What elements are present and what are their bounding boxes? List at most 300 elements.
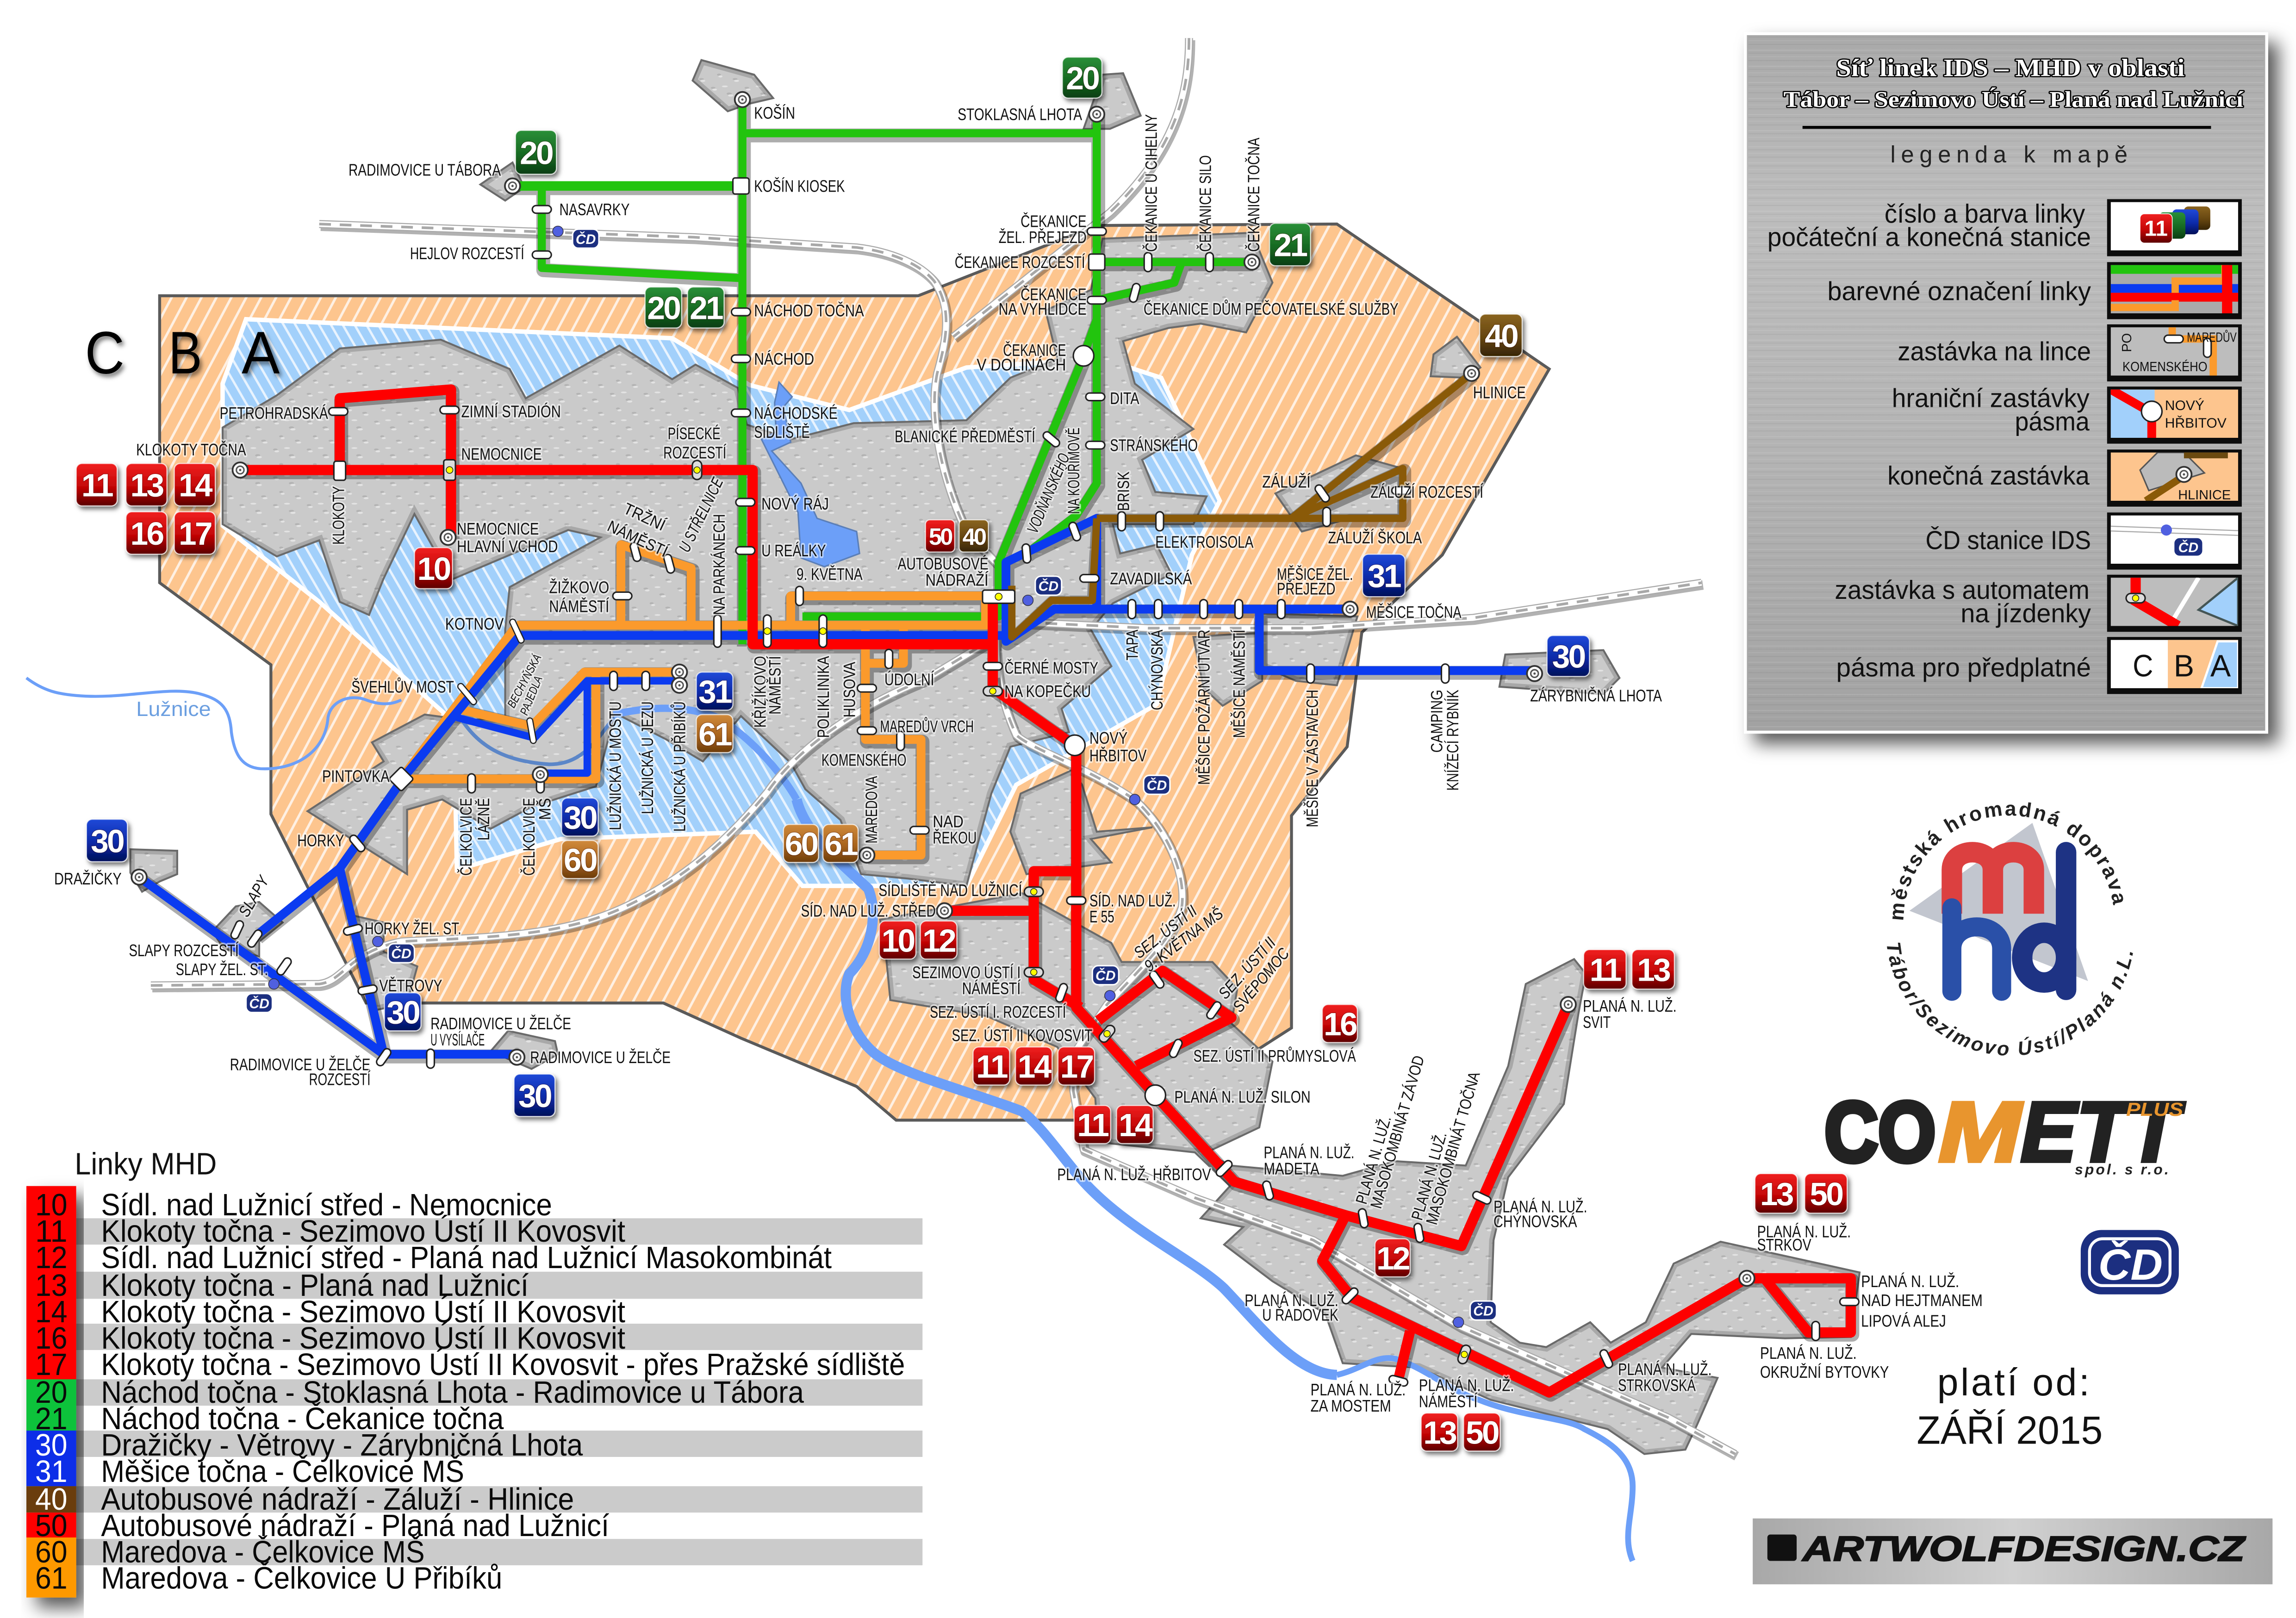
badge 10 at Nemocnice: 10 <box>417 551 450 587</box>
line number badges <box>76 57 1847 1451</box>
orange route badges: 61 <box>698 716 732 752</box>
station labels: horizontal: KOMENSKÉHO <box>821 751 906 770</box>
station labels: horizontal: ČEKANICE <box>1020 285 1087 304</box>
grey built-up city areas <box>131 60 1860 1454</box>
railway station dots <box>268 226 1464 1327</box>
legend descriptions: pásma pro předplatné <box>1836 653 2091 683</box>
station labels: horizontal: NÁMĚSTÍ <box>962 979 1021 998</box>
station labels: vertical and slanted: ČEKANICE TOČNA <box>1245 137 1263 252</box>
orange route badges <box>561 715 858 878</box>
station labels: vertical and slanted: POLIKLINIKA <box>815 656 833 738</box>
station labels: horizontal: NAD HEJTMANEM <box>1861 1291 1983 1310</box>
station labels: horizontal: KOTNOV <box>445 614 504 633</box>
line numbers: 40 <box>35 1482 68 1517</box>
station labels: horizontal: KOŠÍN KIOSEK <box>754 176 845 195</box>
blue route badges <box>87 554 1589 1116</box>
line numbers: 60 <box>35 1535 68 1569</box>
swatch: line number badges <box>2111 202 2238 250</box>
line numbers: 17 <box>35 1348 68 1382</box>
station labels: horizontal: SÍD. NAD LUŽ. <box>1089 891 1176 910</box>
red route badges in the south: 14 <box>1119 1107 1153 1143</box>
badges at Klokoty točna: 11 <box>81 467 113 504</box>
logo: COMETT PLUS: CO <box>1824 1084 1936 1179</box>
station labels: horizontal: SÍDLIŠTĚ NAD LUŽNICÍ <box>878 881 1022 900</box>
station labels: horizontal: KLOKOTY TOČNA <box>136 440 246 459</box>
logo: COMETT PLUS: PLUS <box>2126 1099 2183 1120</box>
orange route badges: 60 <box>785 826 818 862</box>
station labels: vertical and slanted: SLAPY <box>235 872 273 920</box>
green route badges: 20 <box>520 135 553 171</box>
line descriptions: Maredova - Čelkovice MŠ <box>101 1535 425 1569</box>
station labels: horizontal: ZÁLUŽÍ ŠKOLA <box>1328 528 1422 547</box>
swatch: line number badges: 11 <box>2145 216 2168 241</box>
station labels: horizontal: NÁCHODSKÉ <box>754 404 838 423</box>
station labels: vertical and slanted: PLANÁ N. LUŽ. <box>1408 1130 1450 1222</box>
station labels: vertical and slanted: SVÉPOMOC <box>1229 944 1293 1015</box>
legend swatch frames <box>2107 199 2242 694</box>
swatch: stop on line: KOMENSKÉHO <box>2122 360 2208 374</box>
station labels: vertical and slanted: SEZ. ÚSTÍ II <box>1215 934 1279 1002</box>
station labels: horizontal: NEMOCNICE <box>457 519 539 538</box>
station labels: horizontal: U VYSÍLAČE <box>430 1030 485 1049</box>
swatch: zone boundary stop <box>2111 390 2238 438</box>
route shadow <box>141 102 1852 1395</box>
ČD station icons: ČD <box>1039 579 1058 594</box>
station labels: horizontal: ELEKTROISOLA <box>1155 532 1254 551</box>
blue route badges: 31 <box>1368 558 1401 594</box>
station labels: horizontal: STRKOV <box>1757 1235 1811 1254</box>
station labels: horizontal: MĚŠICE TOČNA <box>1366 603 1462 622</box>
station labels: horizontal: PLANÁ N. LUŽ. <box>1757 1222 1851 1241</box>
station labels: horizontal: ZIMNÍ STADIÓN <box>461 402 561 421</box>
ČD station icons: ČD <box>249 996 269 1011</box>
blue route badges: 30 <box>1552 639 1585 675</box>
grey alternating row bands <box>76 1218 922 1565</box>
logo: městská hromadná doprava <box>1882 797 2138 1060</box>
zone letters C B A: B <box>168 320 202 386</box>
station labels: vertical and slanted: MASOKOMBINÁT ZÁVOD <box>1367 1053 1428 1211</box>
station labels: horizontal: MĚŠICE ŽEL. <box>1277 565 1353 584</box>
swatch: railway station <box>2111 516 2238 564</box>
line numbers: 12 <box>35 1241 68 1275</box>
logo: COMETT PLUS: ETT <box>2021 1084 2185 1179</box>
legend descriptions: zastávka na lince <box>1898 336 2091 366</box>
routes 10 to 17 and 50 in red <box>239 390 1851 1393</box>
swatch: stop with ticket machine <box>2111 578 2238 626</box>
station labels: horizontal: STOKLASNÁ LHOTA <box>958 105 1083 124</box>
brown badge 40 at Hlinice: 40 <box>1485 318 1518 354</box>
station labels: horizontal: RADIMOVICE U ŽELČE <box>430 1014 571 1033</box>
red route badges in the south: 13 <box>1637 952 1670 988</box>
red route badges in the south: 11 <box>976 1049 1008 1085</box>
zone A hatched blue area <box>223 319 1220 886</box>
legend descriptions: pásma <box>2015 407 2090 436</box>
station labels: vertical and slanted: TAPA <box>1123 629 1141 660</box>
station labels: vertical and slanted: BRISK <box>1114 472 1132 511</box>
station labels: horizontal: PLANÁ N. LUŽ. <box>1311 1380 1406 1399</box>
station labels: vertical and slanted: VODŇANSKÉHO <box>1024 451 1073 536</box>
orange route badges: 60 <box>564 842 597 878</box>
line descriptions: Klokoty točna - Sezimovo Ústí II Kovosvit <box>101 1295 625 1329</box>
station labels: horizontal: NÁDRAŽÍ <box>926 571 989 590</box>
blue route badges: 30 <box>518 1078 551 1114</box>
station labels: horizontal: BLANICKÉ PŘEDMĚSTÍ <box>895 427 1036 446</box>
zone letters C B A: A <box>242 320 280 386</box>
station labels: vertical and slanted: MĚŠICE NÁMĚSTÍ <box>1230 629 1248 738</box>
station labels: horizontal: NÁMĚSTÍ <box>549 597 610 616</box>
green route badges: 21 <box>690 290 723 326</box>
station labels: vertical and slanted: NÁMĚSTÍ <box>605 517 671 561</box>
station labels: horizontal: ZA MOSTEM <box>1311 1396 1391 1415</box>
ČD station icons: ČD <box>1473 1303 1493 1319</box>
station labels: horizontal: PLANÁ N. LUŽ. <box>1493 1197 1587 1216</box>
station labels: horizontal: SEZ. ÚSTÍ II PRŮMYSLOVÁ <box>1194 1046 1356 1065</box>
station labels: horizontal: PLANÁ N. LUŽ. <box>1760 1344 1857 1363</box>
station labels: horizontal: DRAŽIČKY <box>54 869 122 888</box>
legend descriptions: konečná zastávka <box>1887 461 2090 491</box>
station labels: horizontal: HLINICE <box>1473 383 1526 402</box>
station labels: horizontal: NASAVRKY <box>560 200 630 219</box>
brushed metal plate <box>1745 34 2267 732</box>
orange route badges: 61 <box>824 826 858 862</box>
zone letters C B A <box>85 320 280 386</box>
station labels: horizontal: CHÝNOVSKÁ <box>1493 1212 1577 1231</box>
station labels: horizontal: U ŘADOVEK <box>1262 1306 1338 1325</box>
swatch: terminal stop: HLINICE <box>2178 488 2231 503</box>
red route badges in the south: 50 <box>1466 1415 1499 1451</box>
line descriptions: Klokoty točna - Sezimovo Ústí II Kovosvit - přes Pražské sídliště <box>101 1348 905 1382</box>
station labels: vertical and slanted: U STŘELNICE <box>675 474 727 555</box>
routes 60 and 61 in orange <box>401 545 993 855</box>
logo: COMETT PLUS: M <box>1939 1084 2023 1179</box>
colour column <box>26 1186 76 1598</box>
swatch: coloured lines <box>2111 265 2238 313</box>
line descriptions: Autobusové nádraží - Záluží - Hlinice <box>101 1482 574 1517</box>
station labels: horizontal: AUTOBUSOVÉ <box>897 554 989 573</box>
station labels: horizontal: NOVÝ RÁJ <box>761 494 829 513</box>
badges at Klokoty točna: 14 <box>179 467 213 504</box>
routes 30 and 31 in blue <box>139 518 1535 1054</box>
station labels: horizontal: PETROHRADSKÁ <box>220 404 328 423</box>
station labels: horizontal: ROZCESTÍ <box>309 1070 371 1089</box>
station labels: vertical and slanted: MĚŠICE POŽÁRNÍ ÚTVAR <box>1195 629 1213 785</box>
station labels: horizontal: NÁMĚSTÍ <box>1419 1392 1478 1411</box>
station labels: horizontal: MAREDŮV VRCH <box>880 716 974 736</box>
legend subtitle: legenda k mapě <box>1891 141 2128 168</box>
station labels: horizontal: SEZIMOVO ÚSTÍ I <box>912 963 1020 982</box>
station labels: vertical and slanted: LUŽNICKÁ U MOSTU <box>607 701 625 830</box>
station labels: horizontal: PLANÁ N. LUŽ. <box>1861 1272 1959 1291</box>
line numbers <box>35 1188 68 1596</box>
ČD station icons: ČD <box>1095 968 1115 983</box>
red route badges in the south: 16 <box>1324 1006 1357 1042</box>
swatch: fare zones: B <box>2174 649 2194 684</box>
station labels: horizontal: SÍD. NAD LUŽ. STŘED <box>801 902 936 921</box>
station labels: horizontal: 9. KVĚTNA <box>796 565 863 584</box>
panel: map legend <box>1745 34 2267 732</box>
green route badges: 20 <box>1066 60 1099 96</box>
bus route network <box>139 100 1852 1395</box>
red route badges in the south: 11 <box>1077 1107 1108 1143</box>
station labels: horizontal: ŠVEHLŮV MOST <box>351 677 454 696</box>
line descriptions: Měšice točna - Čelkovice MŠ <box>101 1455 464 1489</box>
station labels: horizontal: SLAPY ROZCESTÍ <box>129 941 239 960</box>
green route badges <box>516 57 1311 328</box>
line numbers: 21 <box>35 1402 68 1436</box>
station labels: horizontal: HLAVNÍ VCHOD <box>457 537 558 556</box>
station labels: vertical and slanted: KLOKOTY <box>330 486 348 545</box>
red route badges in the south: 14 <box>1018 1049 1052 1085</box>
station labels: vertical and slanted: NA KOUŘIMOVĚ <box>1065 428 1083 514</box>
station labels: horizontal: VĚTROVY <box>380 976 442 995</box>
red route badges in the south <box>879 921 1847 1451</box>
station labels: horizontal: ÚDOLNÍ <box>884 670 934 689</box>
station labels: horizontal: MADETA <box>1263 1159 1319 1178</box>
logo blue h <box>1952 908 2002 991</box>
station labels: horizontal: PLANÁ N. LUŽ. <box>1263 1143 1355 1162</box>
station labels: horizontal: ŽEL. PŘEJEZD <box>999 228 1087 247</box>
line descriptions: Sídl. nad Lužnicí střed - Planá nad Lužnicí Masokombinát <box>101 1241 832 1275</box>
legend descriptions: hraniční zastávky <box>1892 384 2090 413</box>
station labels: vertical and slanted: LUŽNICKÁ U PŘIBÍKŮ <box>671 701 689 832</box>
station labels: horizontal: HŘBITOV <box>1089 746 1147 765</box>
station labels: horizontal: STRKOVSKÁ <box>1618 1376 1696 1395</box>
legend descriptions: ČD stanice IDS <box>1925 525 2091 555</box>
red route badges in the south: 50 <box>1810 1176 1842 1212</box>
ČD station icons <box>246 229 1496 1320</box>
station labels: vertical and slanted: ČEKANICE U CIHELNY <box>1142 114 1160 252</box>
validity date: platí od: <box>1937 1362 2090 1404</box>
station labels: vertical and slanted: TRŽNÍ <box>621 499 668 535</box>
swatch: fare zones <box>2111 640 2238 688</box>
logo: COMETT PLUS: spol. s r.o. <box>2075 1161 2169 1177</box>
blue route badges: 30 <box>91 823 124 859</box>
red route badges in the south: 12 <box>922 922 955 958</box>
station labels: horizontal: PLANÁ N. LUŽ. SILON <box>1174 1087 1311 1106</box>
station labels: horizontal: ZÁLUŽÍ ROZCESTÍ <box>1370 483 1484 502</box>
station labels: horizontal: NAD <box>933 812 964 831</box>
station labels: vertical and slanted: PAJEDLA <box>518 674 545 717</box>
line numbers: 16 <box>35 1321 68 1356</box>
logo top ring text: městská hromadná doprava <box>1885 797 2131 921</box>
station labels: horizontal: V DOLINÁCH <box>977 355 1066 374</box>
station labels: vertical and slanted <box>235 114 1484 1226</box>
station labels: horizontal: PÍSECKÉ <box>668 424 721 443</box>
line numbers: 10 <box>35 1188 68 1222</box>
station labels: horizontal: PŘEJEZD <box>1277 579 1335 598</box>
station labels: horizontal: PLANÁ N. LUŽ. <box>1419 1376 1514 1395</box>
station labels: horizontal: ŘEKOU <box>933 828 977 847</box>
red route badges in the south: 17 <box>1060 1049 1093 1085</box>
station labels: horizontal: HEJLOV ROZCESTÍ <box>410 244 524 263</box>
station labels: vertical and slanted: 9. KVĚTNA MŠ <box>1141 904 1226 975</box>
station labels: vertical and slanted: MŠ <box>536 798 554 820</box>
line descriptions: Klokoty točna - Planá nad Lužnicí <box>101 1269 529 1303</box>
credit bar: artwolfdesign.cz: ARTWOLFDESIGN.CZ <box>1801 1530 2246 1569</box>
station labels: horizontal: SVIT <box>1583 1013 1611 1032</box>
legend descriptions: počáteční a konečná stanice <box>1767 223 2091 252</box>
station labels: vertical and slanted: BECHYŇSKÁ <box>504 652 544 710</box>
line descriptions: Maredova - Čelkovice U Přibíků <box>101 1562 502 1596</box>
zone letters C B A: C <box>85 320 124 386</box>
station labels: vertical and slanted: PLANÁ N. LUŽ. <box>1352 1114 1395 1206</box>
station labels: horizontal: U REÁLKY <box>761 541 826 560</box>
line descriptions <box>101 1188 905 1596</box>
line numbers: 50 <box>35 1509 68 1543</box>
swatch: fare zones: A <box>2210 649 2231 684</box>
station labels: vertical and slanted: MASOKOMBINÁT TOČNA <box>1423 1069 1484 1226</box>
route 40 in brown <box>1012 373 1472 637</box>
ČD station icons: ČD <box>1147 778 1167 793</box>
station labels: horizontal: NÁCHOD <box>754 349 814 368</box>
legend descriptions <box>1767 199 2091 683</box>
line numbers: 30 <box>35 1428 68 1462</box>
station labels: horizontal: ČEKANICE DŮM PEČOVATELSKÉ SLUŽBY <box>1144 299 1399 318</box>
badges at Klokoty točna: 17 <box>179 516 212 552</box>
panel: list of MHD lines <box>26 1147 922 1598</box>
routes 20 and 21 in green <box>512 100 1252 644</box>
legend title: Tábor – Sezimovo Ústí – Planá nad Lužnicí <box>1784 87 2244 112</box>
swatch: stop on line <box>2111 327 2238 376</box>
line descriptions: Sídl. nad Lužnicí střed - Nemocnice <box>101 1188 552 1222</box>
station labels: horizontal: NEMOCNICE <box>461 444 542 463</box>
station labels: horizontal: ČERNÉ MOSTY <box>1004 658 1098 677</box>
station labels: vertical and slanted: ČEKANICE SILO <box>1197 155 1215 252</box>
station labels: horizontal: NA KOPEČKU <box>1004 682 1091 701</box>
station labels: horizontal: KOŠÍN <box>754 103 795 122</box>
station labels: horizontal: ZÁLUŽÍ <box>1262 473 1311 492</box>
brown badge 40 at Hlinice <box>1480 314 1522 356</box>
zone C boundary with hatched zone B fill <box>160 224 1549 1120</box>
station labels: vertical and slanted: ČELKOLVICE <box>520 798 538 876</box>
red route badges in the south: 11 <box>1590 952 1621 988</box>
legend descriptions: barevné označení linky <box>1828 277 2091 306</box>
legend title <box>1784 54 2244 112</box>
station labels: horizontal: LIPOVÁ ALEJ <box>1861 1311 1946 1330</box>
station labels: horizontal: SEZ. ÚSTÍ II KOVOSVIT <box>952 1026 1092 1045</box>
station labels: horizontal: HORKY <box>297 831 344 850</box>
validity date <box>1916 1362 2103 1453</box>
station labels: vertical and slanted: CAMPING <box>1428 690 1446 753</box>
station labels: horizontal: SLAPY ŽEL. ST. <box>176 960 268 979</box>
station labels: horizontal: DITA <box>1110 389 1139 408</box>
line descriptions: Dražičky - Větrovy - Zárybničná Lhota <box>101 1428 583 1462</box>
station labels: vertical and slanted: MĚŠICE V ZÁSTAVECH <box>1304 690 1322 828</box>
station labels: horizontal: SÍDLIŠTĚ <box>754 423 810 442</box>
logo grey triangle <box>1910 823 2088 981</box>
logo: ČD railways <box>2081 1230 2179 1294</box>
line numbers: 31 <box>35 1455 68 1489</box>
logo bottom ring text: Tábor/Sezimovo Ústí/Planá n.L. <box>1882 940 2138 1060</box>
legend descriptions: na jízdenky <box>1960 599 2091 629</box>
station labels: horizontal: ŽIŽKOVO <box>549 578 609 597</box>
station labels: horizontal: PINTOVKA <box>322 766 390 785</box>
station labels: horizontal: PLANÁ N. LUŽ. HŘBITOV <box>1057 1165 1211 1184</box>
river Lužnice <box>26 678 1633 1561</box>
logo red m <box>1952 852 2034 914</box>
plate texture <box>1748 37 2264 729</box>
station labels: horizontal: OKRUŽNÍ BYTOVKY <box>1760 1363 1889 1382</box>
swatch: terminal stop <box>2111 447 2238 503</box>
line descriptions: Náchod točna - Čekanice točna <box>101 1402 504 1436</box>
station labels: horizontal: E 55 <box>1089 907 1114 926</box>
ČD station icons: ČD <box>576 231 596 247</box>
list heading: Linky MHD <box>75 1147 217 1181</box>
station labels: vertical and slanted: LÁZNĚ <box>475 798 493 840</box>
station labels: vertical and slanted: LUŽNICKÁ U JEZU <box>639 701 657 814</box>
red route badges in the south: 10 <box>882 922 914 958</box>
divider rule <box>1803 126 2211 129</box>
badges at Klokoty točna: 16 <box>131 516 163 552</box>
logo navy d <box>2022 852 2066 990</box>
station labels: horizontal: NOVÝ <box>1089 728 1127 747</box>
lake Náchod <box>761 382 859 566</box>
station labels: vertical and slanted: NÁMĚSTÍ <box>766 656 784 715</box>
station labels: vertical and slanted: ČELKOLVICE <box>457 798 475 876</box>
badges at Klokoty točna <box>76 463 215 554</box>
line numbers: 61 <box>35 1562 68 1596</box>
station labels: horizontal: ZÁRYBNIČNÁ LHOTA <box>1530 686 1662 705</box>
line numbers: 20 <box>35 1375 68 1410</box>
green route badges: 20 <box>647 290 680 326</box>
line descriptions: Náchod točna - Stoklasná Lhota - Radimovice u Tábora <box>101 1375 804 1410</box>
railway lines <box>151 38 1736 1456</box>
red route badges in the south: 13 <box>1423 1415 1456 1451</box>
station labels: horizontal: ČEKANICE <box>1003 341 1066 360</box>
swatch: zone boundary stop: HŘBITOV <box>2165 416 2227 431</box>
station labels: horizontal: ZAVADILSKÁ <box>1110 569 1192 588</box>
station labels: horizontal: ČEKANICE <box>1020 212 1087 230</box>
station labels: horizontal: PLANÁ N. LUŽ. <box>1618 1360 1712 1379</box>
station labels: horizontal: STRÁNSKÉHO <box>1110 436 1198 454</box>
red route badges in the south: 13 <box>1760 1176 1793 1212</box>
station labels: horizontal: ČEKANICE ROZCESTÍ <box>955 253 1085 272</box>
badges 50 and 40 at bus station <box>926 520 989 552</box>
blue route badges: 30 <box>386 994 419 1030</box>
station labels: vertical and slanted: MAREDOVA <box>863 776 881 843</box>
station labels: horizontal: PLANÁ N. LUŽ. <box>1244 1291 1338 1310</box>
line descriptions: Klokoty točna - Sezimovo Ústí II Kovosvit <box>101 1321 625 1356</box>
line numbers: 11 <box>35 1214 68 1249</box>
credit bar: artwolfdesign.cz <box>1753 1518 2272 1584</box>
logo: ČD railways: ČD <box>2098 1240 2163 1289</box>
station labels: horizontal: RADIMOVICE U ŽELČE <box>530 1048 671 1067</box>
station labels: horizontal: ROZCESTÍ <box>663 443 727 462</box>
station labels: horizontal: RADIMOVICE U ŽELČE <box>230 1055 371 1074</box>
station labels: horizontal: SEZ. ÚSTÍ I. ROZCESTÍ <box>930 1002 1066 1021</box>
station labels: horizontal <box>54 103 1983 1415</box>
validity date: ZÁŘÍ 2015 <box>1916 1409 2103 1453</box>
swatch: fare zones: C <box>2133 649 2153 684</box>
station labels: horizontal: PLANÁ N. LUŽ. <box>1583 996 1677 1015</box>
station labels: vertical and slanted: CHÝNOVSKÁ <box>1148 629 1166 710</box>
logo: COMETT PLUS <box>1824 1084 2185 1179</box>
station labels: horizontal: HORKY ŽEL. ST. <box>365 919 461 938</box>
badges 50 and 40 at bus station: 40 <box>963 523 986 550</box>
station labels: horizontal: RADIMOVICE U TÁBORA <box>348 161 501 180</box>
green route badges: 21 <box>1274 227 1307 263</box>
legend descriptions: zastávka s automatem <box>1835 575 2090 605</box>
badges at Klokoty točna: 13 <box>131 467 163 504</box>
station labels: vertical and slanted: SEZ. ÚSTÍ II <box>1130 902 1201 962</box>
badges 50 and 40 at bus station: 50 <box>929 523 952 550</box>
swatch: stop on line: PO <box>2120 333 2134 352</box>
ČD station icons: ČD <box>391 946 411 962</box>
blue route badges: 31 <box>698 674 732 710</box>
swatch: railway station: ČD <box>2178 540 2198 555</box>
red route badges in the south: 12 <box>1376 1240 1409 1276</box>
line numbers: 13 <box>35 1269 68 1303</box>
